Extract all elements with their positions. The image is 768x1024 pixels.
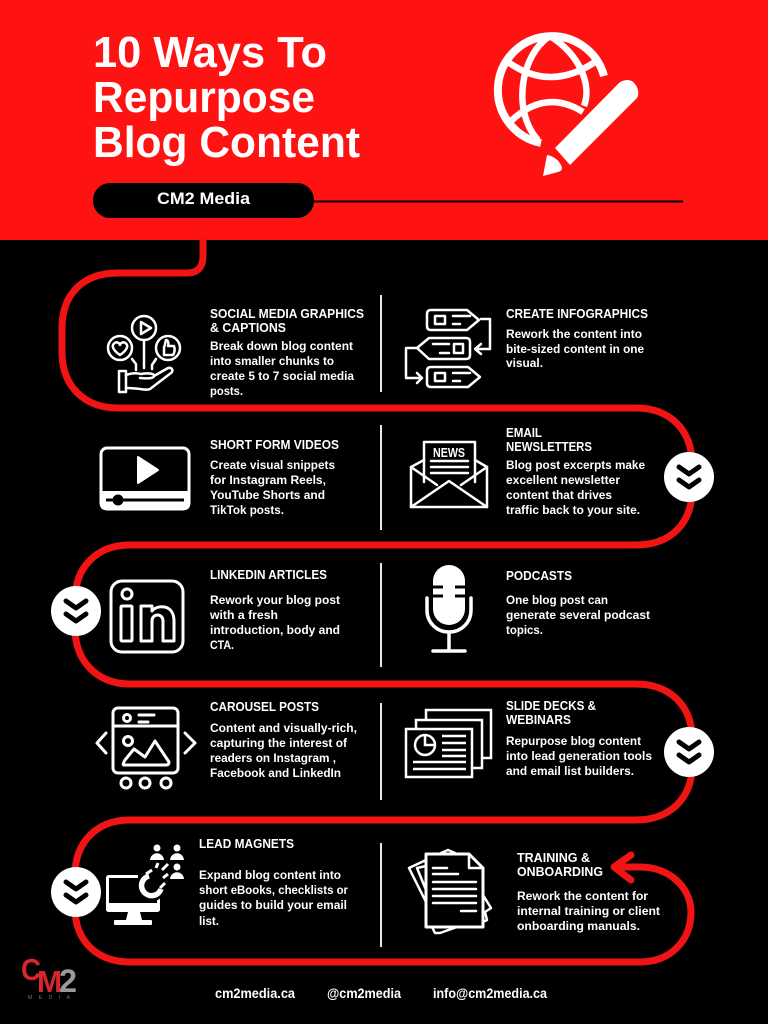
red winding path <box>62 240 692 962</box>
brand pill <box>93 183 314 218</box>
icon: globe and pen <box>498 36 638 176</box>
item: lead magnets <box>199 836 348 928</box>
logo: CM2 Media <box>21 952 77 1001</box>
item: slide decks and webinars: SLIDE DECKS & <box>506 698 596 713</box>
item: short form videos: YouTube Shorts and <box>210 488 325 502</box>
item: lead magnets: guides to build your email <box>199 898 347 912</box>
item: carousel posts <box>210 699 357 780</box>
chevron badge 4 <box>51 867 101 917</box>
item: training and onboarding <box>517 850 660 933</box>
logo: CM2 Media: C <box>21 952 41 987</box>
item: create infographics <box>506 306 648 370</box>
item: social media graphics: create 5 to 7 social media <box>210 369 354 383</box>
item: training and onboarding: onboarding manuals. <box>517 919 640 933</box>
header rule <box>314 200 683 202</box>
item: create infographics: CREATE INFOGRAPHICS <box>506 306 648 321</box>
item: short form videos <box>210 437 339 517</box>
title: Blog Content <box>93 118 360 167</box>
item: podcasts <box>506 568 650 637</box>
item: training and onboarding: ONBOARDING <box>517 864 603 879</box>
icon: infographic flow <box>406 310 490 387</box>
item: slide decks and webinars: Repurpose blog content <box>506 734 641 748</box>
item: slide decks and webinars: WEBINARS <box>506 712 571 727</box>
item: social media graphics: into smaller chunks to <box>210 354 334 368</box>
item: social media graphics <box>210 306 364 398</box>
item: linkedin articles: Rework your blog post <box>210 593 340 607</box>
footer contacts <box>215 986 547 1001</box>
item: email newsletters: content that drives <box>506 488 612 502</box>
title <box>93 28 360 167</box>
chevron badge 1 <box>664 452 714 502</box>
icon: carousel <box>97 708 195 788</box>
item: carousel posts: CAROUSEL POSTS <box>210 699 319 714</box>
item: carousel posts: Facebook and LinkedIn <box>210 766 341 780</box>
logo: CM2 Media: MEDIA <box>28 995 71 1001</box>
item: short form videos: for Instagram Reels, <box>210 473 326 487</box>
item: podcasts: One blog post can <box>506 593 608 607</box>
item: slide decks and webinars: and email list builders. <box>506 764 634 778</box>
header band <box>0 0 768 240</box>
item: social media graphics: Break down blog content <box>210 339 353 353</box>
item: linkedin articles: introduction, body and <box>210 623 340 637</box>
item: lead magnets: list. <box>199 914 219 928</box>
item: podcasts: topics. <box>506 623 543 637</box>
icon: microphone <box>427 565 471 651</box>
item: social media graphics: posts. <box>210 384 243 398</box>
item: short form videos: Create visual snippets <box>210 458 335 472</box>
item: short form videos: TikTok posts. <box>210 503 284 517</box>
item: slide decks and webinars <box>506 698 652 778</box>
item: training and onboarding: TRAINING & <box>517 850 590 865</box>
item: carousel posts: readers on Instagram , <box>210 751 336 765</box>
item: podcasts: PODCASTS <box>506 568 572 583</box>
item: create infographics: bite-sized content in one <box>506 342 644 356</box>
item: lead magnets: LEAD MAGNETS <box>199 836 294 851</box>
item: linkedin articles: LINKEDIN ARTICLES <box>210 567 327 582</box>
logo: CM2 Media: M <box>37 964 62 999</box>
item: email newsletters: EMAIL <box>506 425 542 440</box>
footer contacts: cm2media.ca <box>215 986 295 1001</box>
chevron badge 2 <box>51 586 101 636</box>
item: create infographics: Rework the content into <box>506 327 642 341</box>
chevron badge 3 <box>664 727 714 777</box>
item: lead magnets: short eBooks, checklists or <box>199 883 348 897</box>
icon: video player <box>100 448 190 510</box>
item: social media graphics: SOCIAL MEDIA GRAPHICS <box>210 306 364 321</box>
item: linkedin articles <box>209 567 340 652</box>
item: email newsletters <box>506 425 645 517</box>
item: short form videos: SHORT FORM VIDEOS <box>210 437 339 452</box>
icon: social media hand <box>108 316 180 392</box>
title: Repurpose <box>93 73 315 122</box>
icon: slide decks <box>406 710 491 777</box>
footer contacts: @cm2media <box>327 986 401 1001</box>
item: email newsletters: Blog post excerpts make <box>506 458 645 472</box>
item: email newsletters: excellent newsletter <box>506 473 620 487</box>
item: carousel posts: Content and visually-rich, <box>210 721 357 735</box>
item: create infographics: visual. <box>506 356 543 370</box>
title: 10 Ways To <box>93 28 327 77</box>
icon: lead magnet <box>106 844 184 925</box>
logo: CM2 Media: 2 <box>59 963 77 999</box>
item: training and onboarding: internal training or client <box>517 904 660 918</box>
item: linkedin articles: with a fresh <box>209 608 278 622</box>
item: lead magnets: Expand blog content into <box>199 868 341 882</box>
footer contacts: info@cm2media.ca <box>433 986 547 1001</box>
item: email newsletters: NEWSLETTERS <box>506 439 592 454</box>
item: slide decks and webinars: into lead generation tools <box>506 749 652 763</box>
item: linkedin articles: CTA. <box>210 638 234 652</box>
brand pill: CM2 Media <box>157 189 251 208</box>
item: carousel posts: capturing the interest of <box>210 736 348 750</box>
icon: linkedin <box>111 581 183 652</box>
item: email newsletters: traffic back to your site. <box>506 503 640 517</box>
icon: document stack <box>409 850 491 933</box>
item: podcasts: generate several podcast <box>506 608 650 622</box>
item: training and onboarding: Rework the content for <box>517 889 648 903</box>
item: social media graphics: & CAPTIONS <box>210 320 286 335</box>
icon: news envelope: NEWS <box>433 446 465 460</box>
icon: news envelope <box>411 442 487 507</box>
